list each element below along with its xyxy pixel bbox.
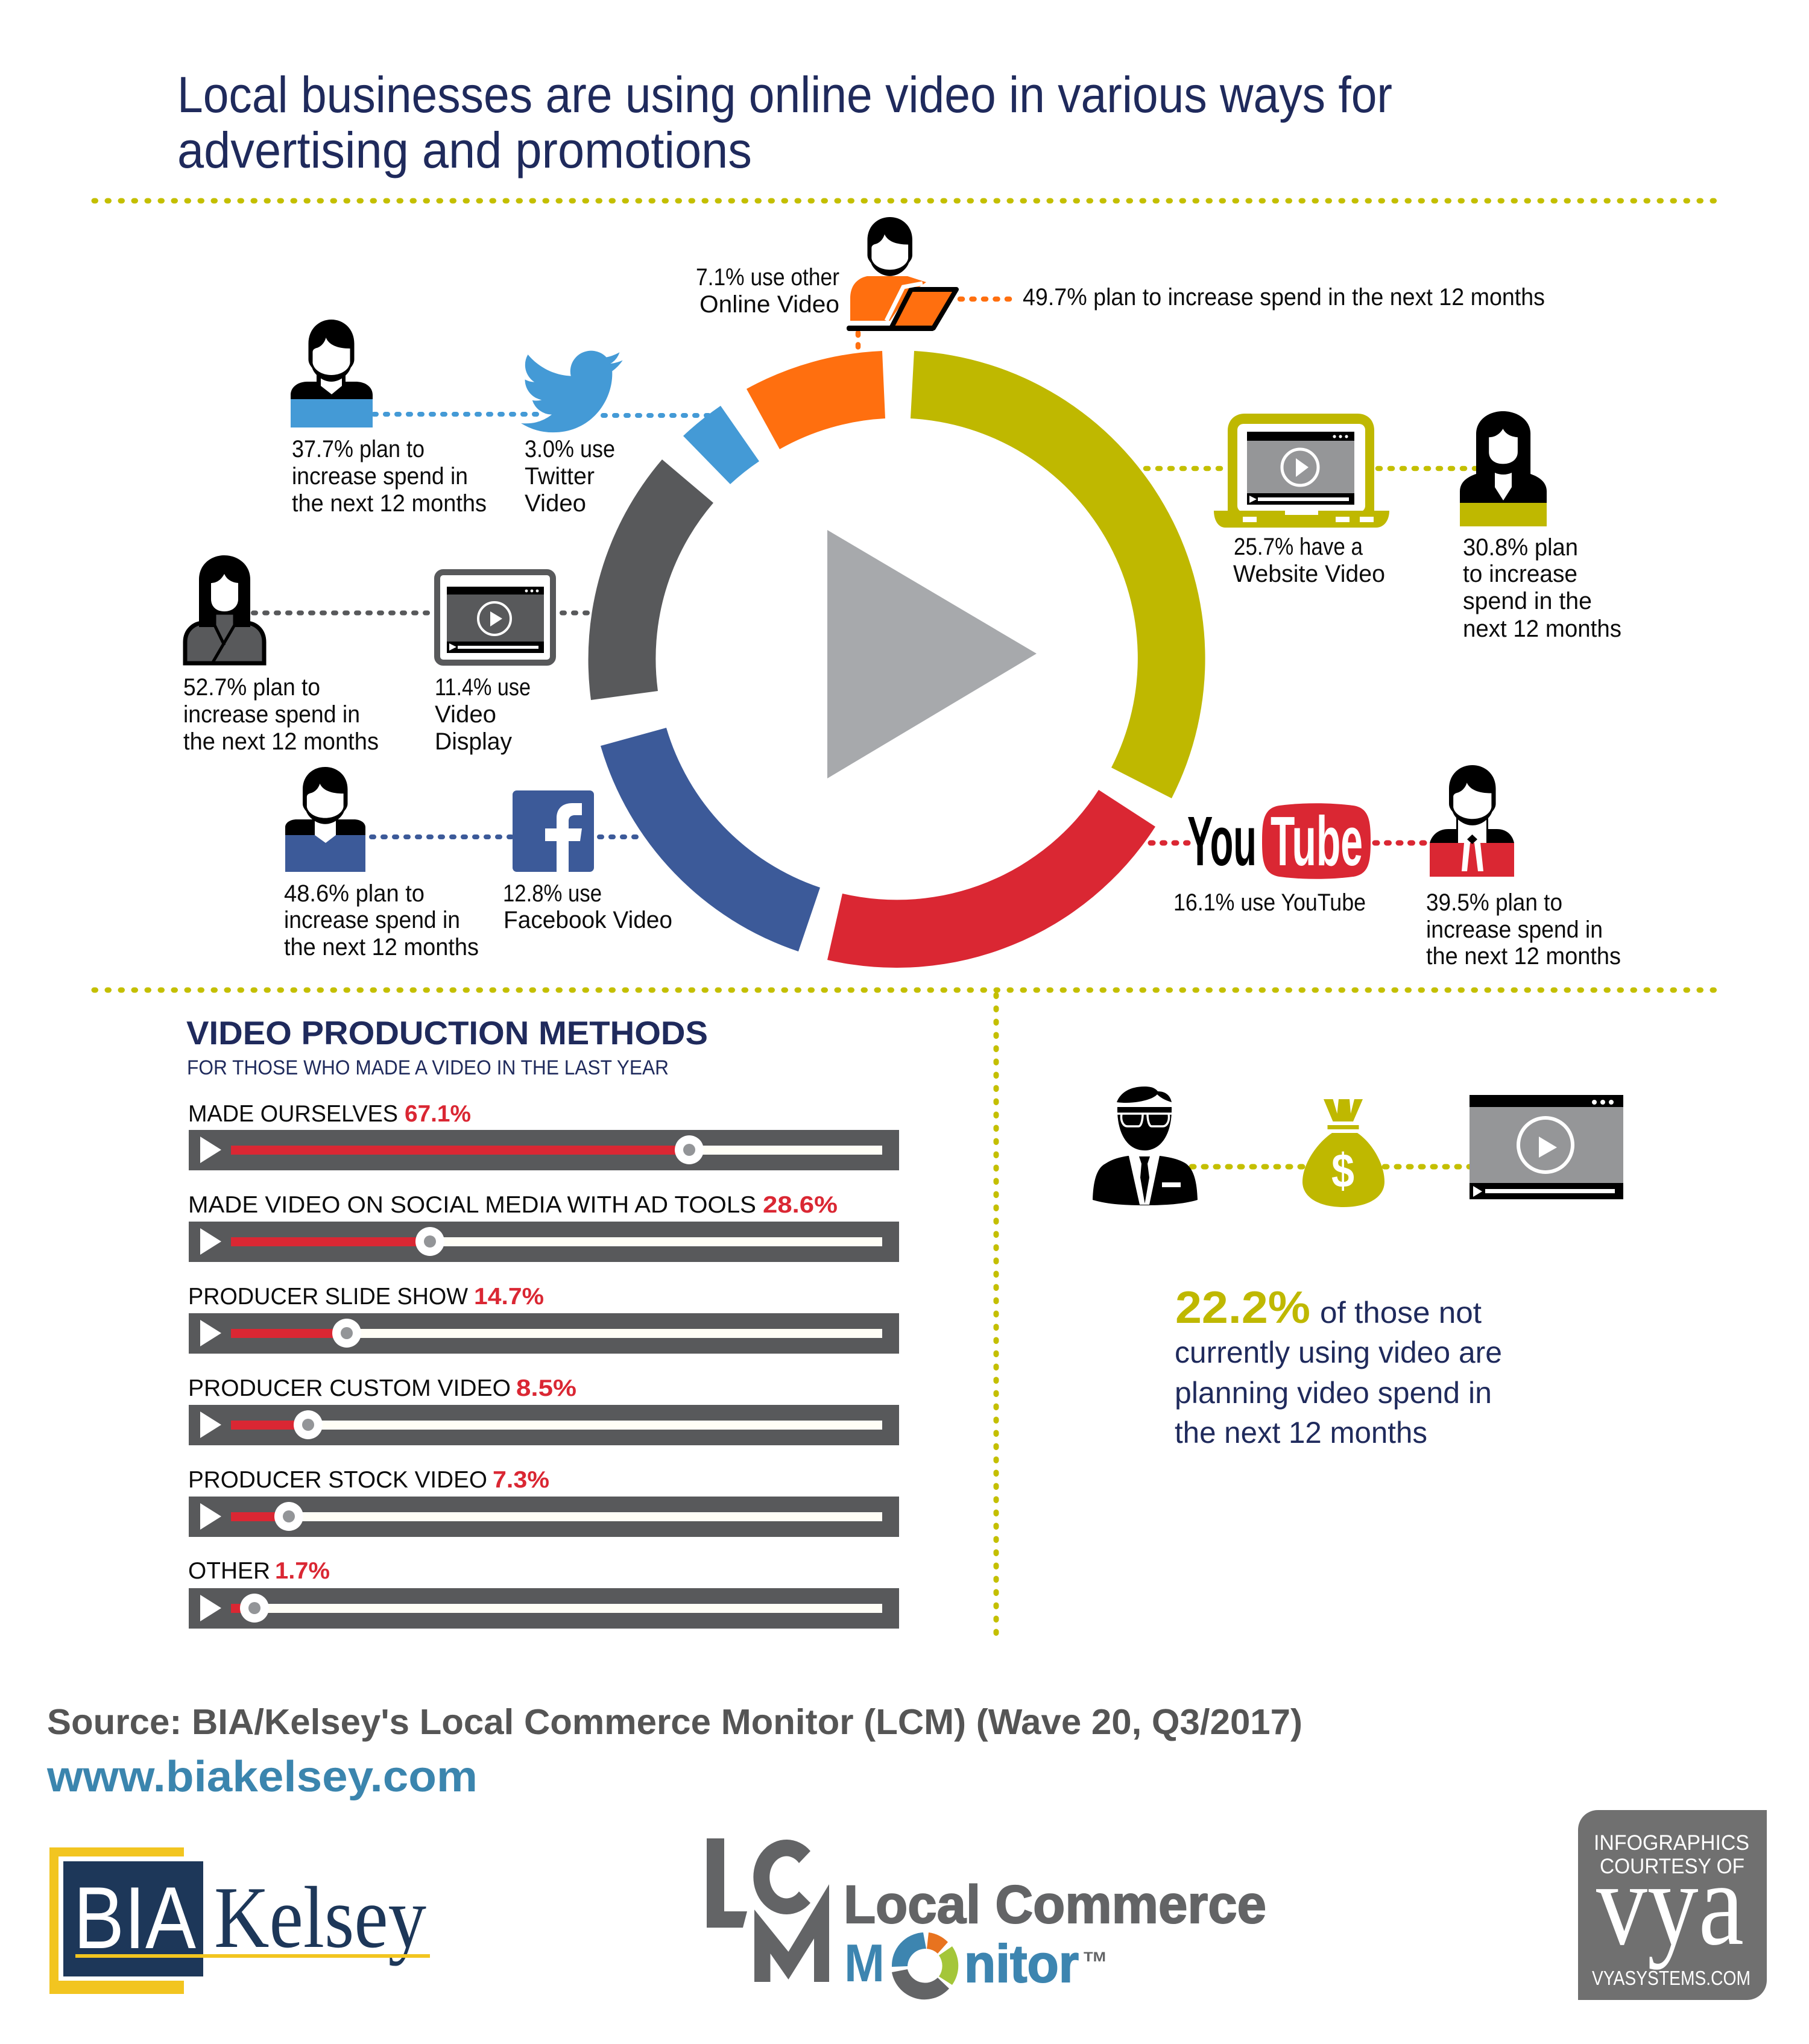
icon: video display tablet (437, 572, 553, 663)
logo: VYA badge: COURTESY OF (1600, 1855, 1744, 1878)
connector: facebook (371, 834, 645, 839)
label: other online video plan: 49.7% plan to increase spend in the next 12 months (1023, 284, 1545, 311)
label: twitter plan: increase spend in (292, 463, 468, 490)
segment: other online video (747, 351, 885, 449)
connector: website video (1146, 466, 1476, 471)
label: youtube plan: 39.5% plan to (1426, 889, 1562, 916)
row: made ourselves: MADE OURSELVES (188, 1101, 398, 1127)
play triangle (827, 530, 1037, 778)
label: twitter: Twitter (525, 463, 595, 490)
label: website video (1233, 534, 1385, 587)
segment: twitter (683, 406, 759, 484)
callout: 22.2% not using video: planning video spend in (1175, 1376, 1492, 1410)
label: facebook plan: increase spend in (284, 907, 460, 933)
icon: website video laptop (1214, 414, 1389, 528)
logo: VYA badge: INFOGRAPHICS (1594, 1831, 1749, 1855)
label: twitter plan: 37.7% plan to (292, 436, 425, 462)
label: website video plan: next 12 months (1463, 616, 1621, 642)
label: video display: Video (435, 701, 496, 728)
row: social media ad tools (188, 1192, 899, 1262)
logo: VYA badge: vya (1596, 1838, 1744, 1970)
row: producer stock video: 7.3% (493, 1467, 549, 1493)
heading: video production methods: VIDEO PRODUCTION METHODS (186, 1014, 708, 1052)
icon: money bag: $ (1331, 1144, 1354, 1197)
label: other online video: Online Video (699, 291, 839, 318)
segment: video display (589, 459, 713, 700)
callout: 22.2% not using video: the next 12 months (1175, 1416, 1427, 1449)
label: twitter plan (292, 436, 487, 517)
label: website video: 25.7% have a (1234, 534, 1363, 560)
label: facebook plan: 48.6% plan to (284, 880, 425, 907)
logo: BIA Kelsey (49, 1847, 430, 1994)
label: twitter: 3.0% use (525, 436, 615, 462)
icon: man facebook (285, 767, 365, 872)
logo: LCM Local Commerce Monitor: TM (1084, 1949, 1106, 1964)
row: other: OTHER (188, 1558, 270, 1584)
logo: LCM Local Commerce Monitor (707, 1838, 1266, 1999)
label: website video plan (1463, 534, 1621, 642)
title: Local businesses are using online video in various ways for (177, 66, 1392, 123)
row: producer custom video (188, 1375, 899, 1445)
callout: 22.2% not using video: currently using video are (1175, 1336, 1502, 1369)
logo: LCM Local Commerce Monitor: Local Commerce (844, 1874, 1266, 1934)
label: youtube: 16.1% use YouTube (1173, 889, 1366, 916)
label: website video plan: to increase (1463, 561, 1577, 587)
donut chart (589, 351, 1205, 968)
logo: LCM Local Commerce Monitor: nitor (964, 1934, 1079, 1993)
row: social media ad tools: 28.6% (763, 1192, 838, 1218)
icon: youtube logo: Tube (1271, 802, 1363, 880)
row: producer custom video: PRODUCER CUSTOM VIDEO (188, 1375, 511, 1401)
title (177, 66, 1392, 178)
label: website video plan: 30.8% plan (1463, 534, 1578, 561)
connector: man to bag to video (1192, 1164, 1470, 1170)
label: facebook: 12.8% use (503, 880, 602, 907)
logo: BIA Kelsey: BIA (74, 1869, 197, 1967)
label: youtube plan: the next 12 months (1426, 943, 1621, 970)
row: producer slide show (188, 1284, 899, 1354)
label: facebook: Facebook Video (504, 907, 672, 933)
row: producer slide show: PRODUCER SLIDE SHOW (188, 1284, 468, 1310)
label: facebook plan (284, 880, 479, 960)
segment: facebook (601, 728, 820, 951)
icon: facebook (513, 790, 594, 872)
label: facebook (503, 880, 672, 933)
row: other (188, 1558, 899, 1629)
label: twitter (525, 436, 615, 517)
connector: twitter (374, 414, 709, 415)
title: advertising and promotions (177, 122, 752, 178)
label: facebook plan: the next 12 months (284, 934, 479, 960)
connector: youtube (1151, 841, 1430, 845)
logo: LCM Local Commerce Monitor: M (844, 1933, 885, 1993)
icon: woman gray (185, 555, 264, 663)
icon: money bag (1302, 1099, 1384, 1207)
row: made ourselves (188, 1101, 899, 1170)
connector: video display (253, 610, 590, 615)
icon: youtube logo (1187, 802, 1371, 880)
label: other online video: 7.1% use other (696, 264, 839, 291)
row: made ourselves: 67.1% (405, 1101, 471, 1127)
row: producer stock video: PRODUCER STOCK VIDEO (188, 1467, 487, 1493)
label: youtube plan (1426, 889, 1621, 970)
callout: 22.2% not using video: 22.2% (1175, 1282, 1310, 1333)
icon: youtube logo: You (1187, 802, 1257, 880)
callout: 22.2% not using video (1175, 1282, 1502, 1449)
icon: woman olive (1460, 411, 1547, 526)
label: video display plan: 52.7% plan to (183, 674, 320, 701)
icon: video player (1470, 1095, 1623, 1199)
segment: youtube (827, 790, 1155, 968)
label: youtube plan: increase spend in (1426, 916, 1603, 943)
row: producer slide show: 14.7% (474, 1284, 544, 1310)
row: other: 1.7% (275, 1558, 330, 1584)
row: producer custom video: 8.5% (516, 1375, 576, 1401)
callout: 22.2% not using video: of those not (1320, 1296, 1482, 1330)
label: video display plan (183, 674, 379, 755)
row: social media ad tools: MADE VIDEO ON SOCIAL MEDIA WITH AD TOOLS (188, 1192, 756, 1218)
segment: website video (911, 351, 1205, 798)
label: video display plan: the next 12 months (183, 728, 379, 755)
label: twitter: Video (525, 490, 586, 517)
icon: man blue (291, 320, 373, 427)
logo: VYA badge: VYASYSTEMS.COM (1592, 1967, 1751, 1989)
label: video display: 11.4% use (435, 674, 531, 701)
source: Source: BIA/Kelsey's Local Commerce Monitor (LCM) (Wave 20, Q3/2017) (47, 1702, 1302, 1742)
icon: twitter bird (521, 351, 622, 432)
website url: www.biakelsey.com (46, 1753, 478, 1801)
label: video display (435, 674, 531, 755)
logo: VYA badge (1578, 1810, 1767, 2000)
subheading: FOR THOSE WHO MADE A VIDEO IN THE LAST YEAR (187, 1056, 669, 1079)
label: website video: Website Video (1233, 561, 1385, 587)
label: other online video (696, 264, 839, 318)
icon: person with laptop (orange) (847, 217, 956, 331)
label: video display plan: increase spend in (183, 701, 360, 728)
label: video display: Display (435, 728, 512, 755)
label: website video plan: spend in the (1463, 588, 1592, 614)
icon: man with tie red (1430, 765, 1514, 877)
label: twitter plan: the next 12 months (292, 490, 487, 517)
icon: businessman with glasses (1093, 1087, 1198, 1205)
connector: other online video (858, 299, 1015, 351)
logo: BIA Kelsey: Kelsey (214, 1869, 426, 1966)
row: producer stock video (188, 1467, 899, 1537)
